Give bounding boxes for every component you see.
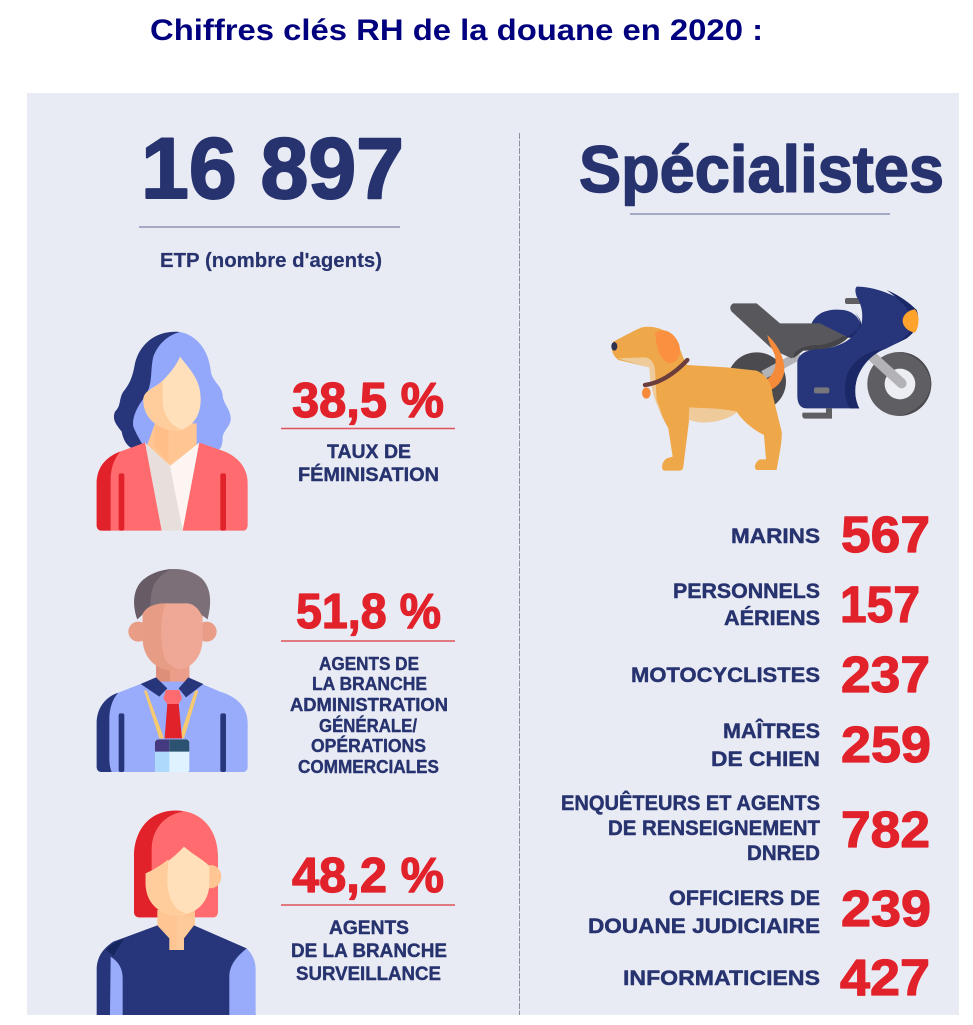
icon: dog and motorbike	[611, 287, 931, 471]
row: enquêteurs 782	[561, 791, 930, 865]
stat: 51,8 % administration: AGENTS DE	[319, 654, 419, 674]
row: maîtres de chien 259: 259	[841, 716, 931, 773]
stat: 51,8 % administration: LA BRANCHE	[312, 674, 427, 694]
stat: 48,2 % surveillance: 48,2 %	[292, 849, 444, 903]
stat: 51,8 % administration: ADMINISTRATION	[290, 695, 448, 715]
title: Chiffres clés RH de la douane en 2020 :	[150, 14, 763, 47]
row: enquêteurs 782: DE RENSEIGNEMENT	[608, 817, 820, 840]
row: motocyclistes 237: MOTOCYCLISTES	[631, 664, 820, 687]
list: specialists	[561, 506, 931, 1006]
row: officiers de douane judiciaire 239: 239	[841, 880, 931, 937]
icon: woman with red hair	[97, 811, 256, 1015]
big number: 16 897: 16 897	[141, 121, 404, 217]
stat: 51,8 % administration: OPÉRATIONS	[311, 735, 426, 756]
stat: 48,2 % surveillance	[281, 849, 455, 985]
row: informaticiens 427: 427	[840, 949, 930, 1006]
row: informaticiens 427	[623, 949, 930, 1006]
row: officiers de douane judiciaire 239	[588, 880, 931, 938]
caption: ETP: ETP (nombre d'agents)	[160, 250, 382, 272]
stat: 38,5 % feminisation: 38,5 %	[292, 374, 444, 428]
row: enquêteurs 782: ENQUÊTEURS ET AGENTS	[561, 791, 820, 815]
row: marins 567: MARINS	[731, 525, 820, 548]
row: personnels aériens 157: PERSONNELS	[673, 580, 820, 603]
stat: 51,8 % administration: COMMERCIALES	[298, 757, 439, 777]
panel: total headcount	[139, 121, 404, 272]
row: officiers de douane judiciaire 239: DOUANE JUDICIAIRE	[588, 915, 820, 938]
icon: motorbike	[727, 287, 931, 419]
icon: dog	[611, 327, 784, 471]
row: marins 567	[731, 506, 930, 563]
row: enquêteurs 782: 782	[841, 801, 930, 858]
row: informaticiens 427: INFORMATICIENS	[623, 967, 820, 990]
stat: 38,5 % feminisation	[281, 374, 455, 486]
stat: 51,8 % administration: 51,8 %	[296, 585, 441, 639]
row: personnels aériens 157: AÉRIENS	[724, 607, 820, 630]
stat: 48,2 % surveillance: SURVEILLANCE	[296, 963, 441, 985]
row: maîtres de chien 259: MAÎTRES	[723, 719, 820, 743]
stat: 48,2 % surveillance: DE LA BRANCHE	[291, 940, 447, 962]
row: personnels aériens 157: 157	[840, 576, 920, 633]
row: motocyclistes 237	[631, 646, 930, 703]
icon: man with badge	[97, 569, 248, 772]
heading: Spécialistes: Spécialistes	[579, 132, 944, 206]
row: maîtres de chien 259	[711, 716, 931, 773]
row: personnels aériens 157	[673, 576, 920, 633]
stat: 48,2 % surveillance: AGENTS	[329, 917, 409, 939]
row: motocyclistes 237: 237	[841, 646, 930, 703]
row: enquêteurs 782: DNRED	[747, 842, 820, 865]
stat: 51,8 % administration: GÉNÉRALE/	[319, 715, 417, 736]
stat: 51,8 % administration	[281, 585, 455, 777]
row: maîtres de chien 259: DE CHIEN	[711, 748, 820, 771]
row: marins 567: 567	[841, 506, 930, 563]
stat: 38,5 % feminisation: TAUX DE	[327, 441, 411, 463]
stat: 38,5 % feminisation: FÉMINISATION	[298, 463, 439, 486]
row: officiers de douane judiciaire 239: OFFICIERS DE	[669, 887, 820, 910]
icon: woman with blue hair	[97, 332, 248, 531]
